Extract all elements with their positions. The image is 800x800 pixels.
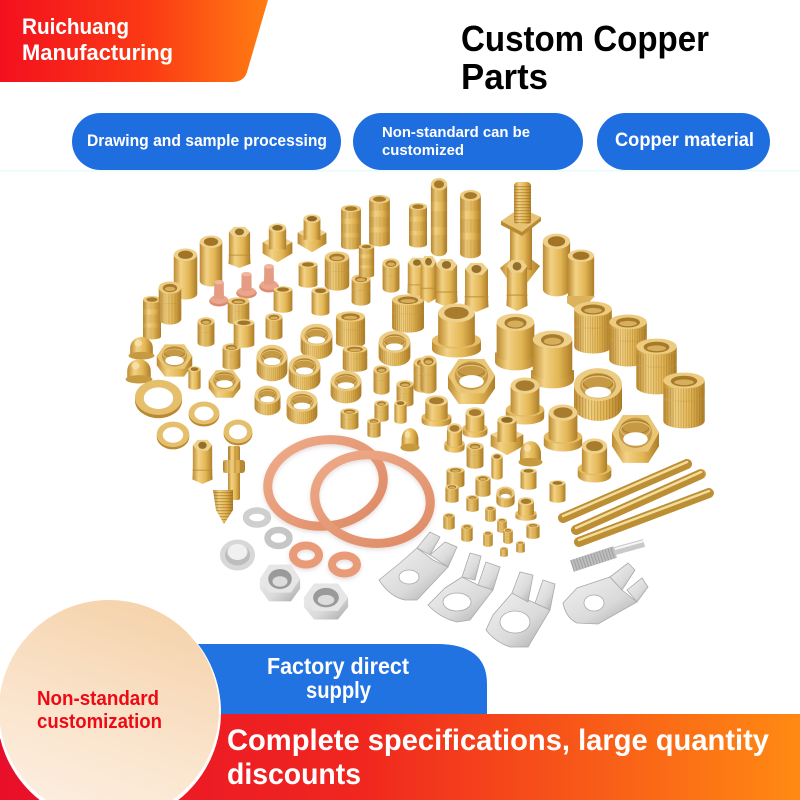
factory direct supply tab: Factory direct bbox=[267, 653, 409, 679]
left cluster of brass inserts bbox=[126, 195, 432, 524]
feature pill: copper material: Copper material bbox=[615, 130, 754, 151]
terminal 4 bbox=[563, 563, 648, 624]
factory direct supply tab: supply bbox=[306, 677, 371, 703]
silver nuts and washers bbox=[222, 510, 348, 619]
factory direct supply tab bbox=[170, 644, 487, 714]
copper sealing washers bbox=[262, 432, 436, 574]
customization circle badge bbox=[0, 600, 221, 800]
discount banner bbox=[0, 714, 800, 800]
brand banner: Ruichuang bbox=[22, 14, 129, 39]
threaded stud with square flange bbox=[500, 182, 541, 283]
feature pill: non-standard can be customized: customized bbox=[382, 142, 464, 159]
discount banner: Complete specifications, large quantity bbox=[227, 724, 769, 757]
feature pill: non-standard can be customized: Non-standard can be bbox=[382, 124, 530, 141]
feature pill: copper material bbox=[597, 113, 770, 170]
title bbox=[461, 18, 709, 97]
feature pill: non-standard can be customized bbox=[353, 113, 583, 170]
threaded brass rods bbox=[563, 462, 709, 542]
feature pill: drawing and sample processing bbox=[72, 113, 341, 170]
brand banner: Manufacturing bbox=[22, 40, 173, 65]
customization circle badge: customization bbox=[37, 711, 162, 733]
right cluster of brass bushings bbox=[420, 178, 705, 483]
discount banner: discounts bbox=[227, 758, 361, 791]
brand banner bbox=[0, 0, 268, 82]
terminal 1 bbox=[379, 532, 457, 600]
silver terminal lugs bbox=[379, 532, 648, 647]
product photo: copper and brass parts bbox=[126, 178, 709, 647]
brass screw bbox=[213, 446, 245, 524]
customization circle badge: Non-standard bbox=[37, 688, 159, 710]
knurled silver pin bbox=[572, 541, 644, 566]
title: Parts bbox=[461, 56, 548, 97]
terminal 2 bbox=[428, 553, 500, 622]
title: Custom Copper bbox=[461, 18, 709, 59]
feature pill: drawing and sample processing: Drawing and sample processing bbox=[87, 131, 327, 150]
small brass inserts bbox=[443, 467, 565, 557]
terminal 3 bbox=[486, 572, 555, 647]
